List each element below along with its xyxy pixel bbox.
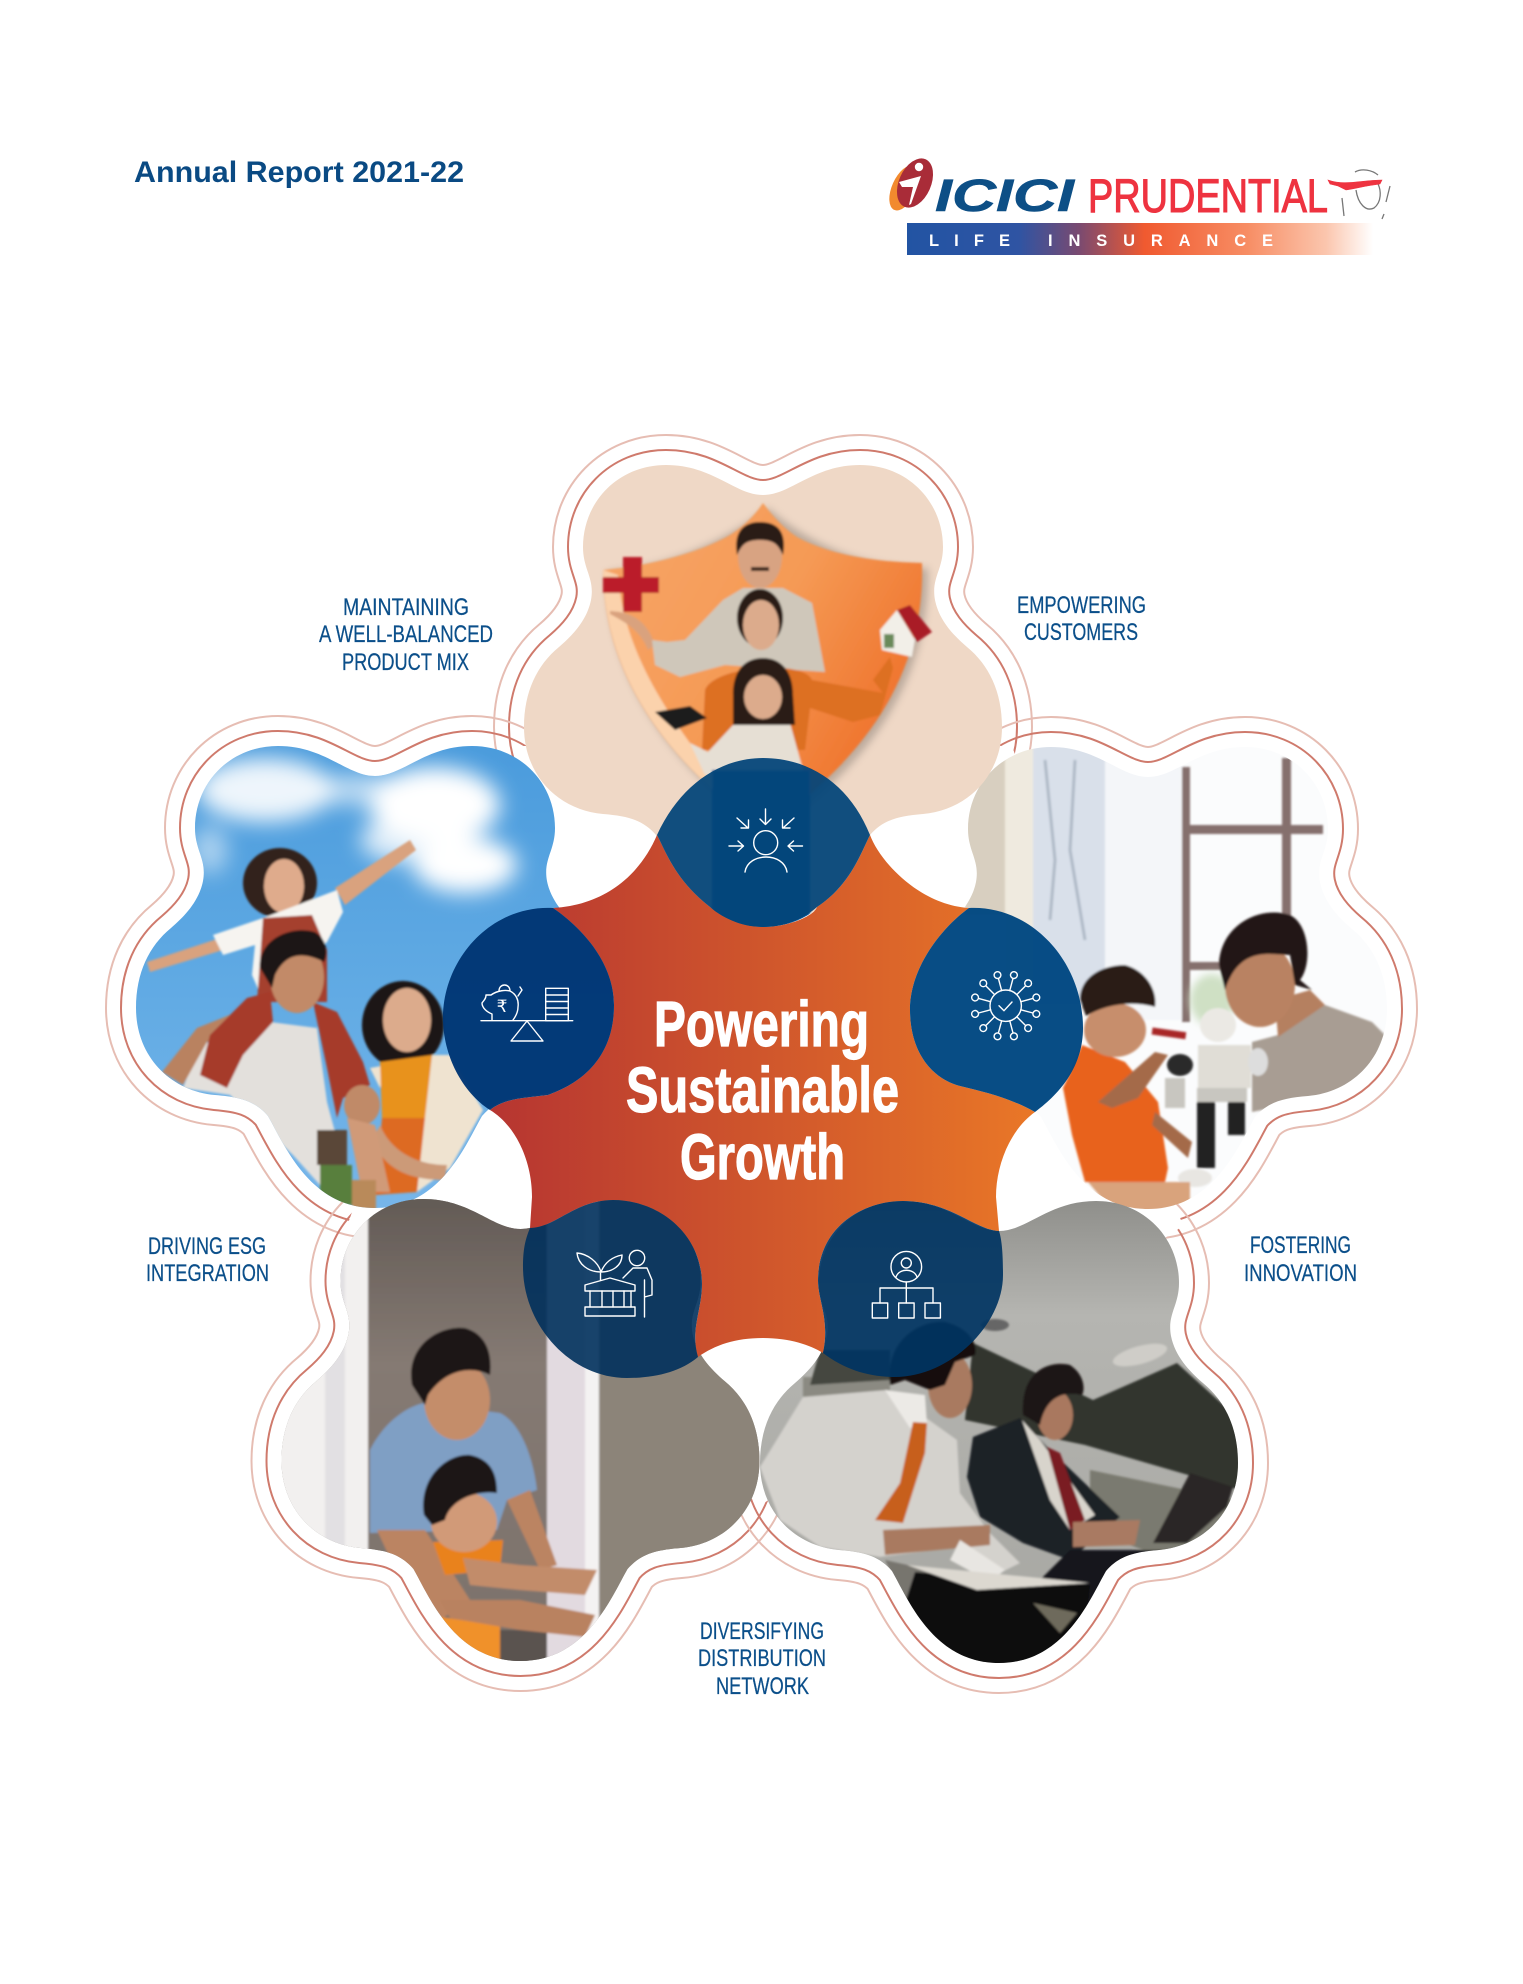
label: empowering customers: EMPOWERING [1017,592,1146,619]
label: diversifying distribution network: DISTRIBUTION [698,1645,826,1672]
label: fostering innovation: FOSTERING [1250,1232,1351,1259]
logo: ICICI Prudential Life Insurance [883,153,1390,255]
label: driving esg integration [146,1233,269,1287]
logo icon: i mark [883,153,940,215]
icon: distribution network hierarchy [872,1251,940,1318]
label: fostering innovation [1244,1232,1357,1287]
icon: circuit with check mark [971,971,1040,1040]
label: diversifying distribution network: NETWORK [716,1673,809,1700]
icon: customer with arrows [729,809,802,872]
icon: balance with piggy bank [481,985,573,1041]
central heading: Sustainable [626,1054,899,1126]
icon: ESG plant, institution and person [577,1250,652,1317]
logo wordmark: Prudential: PRUDENTIAL [1088,169,1328,222]
icon: graduation cap [655,706,707,730]
logo icon: Prudence head [1328,170,1390,219]
decorative outline rings around the five petals [136,465,1387,1663]
label: maintaining a well-balanced product mix: A WELL-BALANCED [319,621,493,648]
logo bar text: insurance: INSURANCE [1048,232,1273,250]
petal photo: bottom left, father and son washing hands [275,1195,770,1675]
label: diversifying distribution network: DIVERSIFYING [700,1618,824,1645]
dark lobe: bottom right [818,1201,1003,1377]
label: maintaining a well-balanced product mix: MAINTAINING [343,594,469,621]
label: driving esg integration: DRIVING ESG [148,1233,266,1260]
dark lobe: top [657,758,870,927]
logo bar: life insurance [907,223,1373,255]
title: annual report: Annual Report 2021-22 [134,156,464,189]
dark lobe: left [443,908,614,1110]
label: empowering customers [1017,592,1146,646]
label: maintaining a well-balanced product mix [319,594,493,676]
label: driving esg integration: INTEGRATION [146,1260,269,1287]
label: fostering innovation: INNOVATION [1244,1260,1357,1287]
icon: house [880,605,932,657]
dark lobe: bottom left [523,1200,702,1378]
label: empowering customers: CUSTOMERS [1024,619,1138,646]
dark lobe: right [910,908,1083,1112]
petal photo: top, family with shield [520,460,1010,940]
petal photo: bottom right, advisor and customer in car [755,1195,1250,1680]
central star: powering sustainable growth [490,835,1035,1357]
petal photo: right, boy and father with robot [964,747,1384,1209]
central heading: Powering [654,988,869,1060]
label: maintaining a well-balanced product mix: PRODUCT MIX [342,649,469,676]
icon: balance with piggy bank: ₹ [497,997,507,1016]
petal photo: left, family under the sky [130,740,630,1220]
central heading: Growth [680,1121,845,1193]
icon: red cross [603,557,659,612]
logo wordmark: ICICI: ICICI [935,170,1076,221]
central heading [626,988,899,1193]
logo bar text: life: LIFE [929,232,1010,250]
label: diversifying distribution network [698,1618,826,1700]
